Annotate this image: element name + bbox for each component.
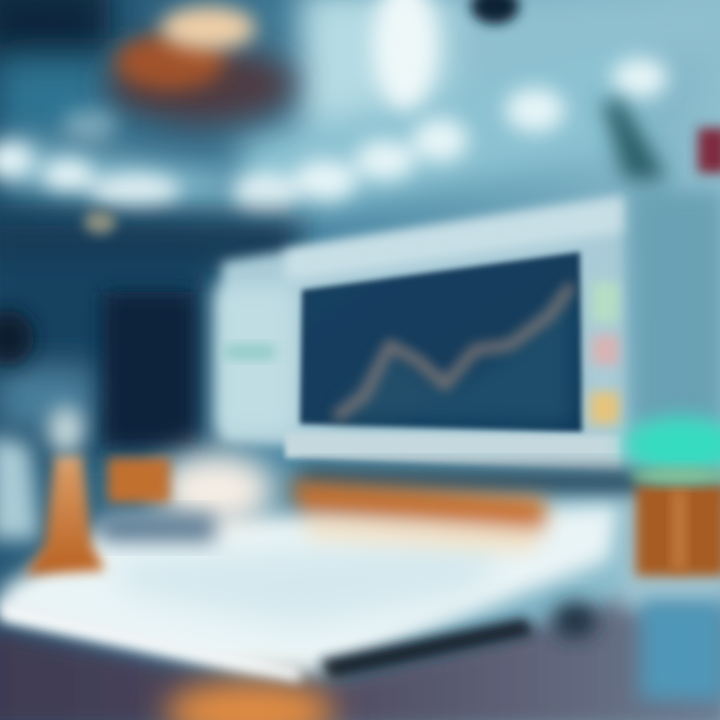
orange cone object <box>25 406 105 575</box>
chart line <box>335 285 572 418</box>
monitor screen <box>300 252 582 432</box>
monitor: frame and screen <box>214 195 630 470</box>
orange strip under monitor <box>290 480 545 552</box>
bright wall glow <box>373 0 437 110</box>
ceiling: upper band <box>0 0 720 225</box>
monitor bottom bezel <box>285 432 620 470</box>
small warm light <box>84 210 116 234</box>
orange block behind desk <box>108 458 170 503</box>
dark spot top <box>471 0 519 24</box>
cup: right foreground object <box>624 417 720 700</box>
row of ceiling lights <box>0 58 668 217</box>
dark column <box>103 292 195 447</box>
dark blob far left <box>0 310 34 366</box>
ceiling lamp: orange fixture <box>105 6 295 123</box>
right column <box>602 100 720 430</box>
side widgets <box>590 282 620 424</box>
left wall: dark area <box>0 215 300 450</box>
desk surface <box>0 435 620 675</box>
bottom floor <box>0 600 720 720</box>
grey box on desk <box>100 514 215 542</box>
dark band under monitor <box>300 468 720 498</box>
chart area tint <box>335 290 572 425</box>
